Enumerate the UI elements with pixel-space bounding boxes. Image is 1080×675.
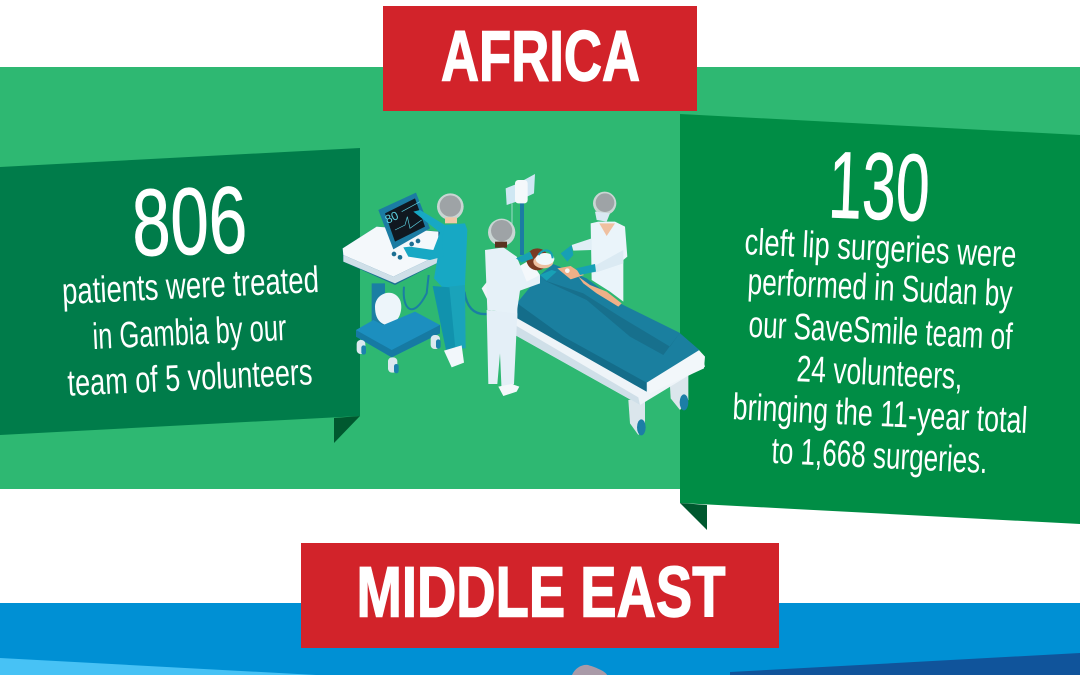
icon: tube — [464, 292, 487, 314]
heading: Middle East: MIDDLE EAST — [356, 554, 726, 632]
icon: surgeon at right — [561, 192, 627, 302]
panel: Middle East blue band — [0, 603, 1080, 675]
text: Gambia description — [61, 259, 320, 404]
text: Sudan description: to 1,668 surgeries. — [771, 430, 988, 481]
text: Gambia description: team of 5 volunteers — [67, 351, 313, 404]
icon: monitor cart: 80 — [383, 208, 401, 227]
panel: Gambia ribbon — [0, 148, 360, 443]
text: Sudan description: 24 volunteers, — [796, 348, 963, 397]
text: Gambia description: patients were treated — [61, 259, 320, 312]
icon: nurse at monitor — [403, 193, 467, 367]
heading: Middle East — [301, 543, 779, 648]
icon: IV stand — [506, 174, 535, 255]
text: Gambia description: in Gambia by our — [92, 307, 287, 357]
illustration: surgical team operating on a patient — [343, 174, 705, 435]
icon: operating table and patient — [482, 248, 705, 435]
icon: monitor cart — [343, 193, 442, 373]
stat: 130: 130 — [827, 132, 931, 242]
panel: Africa green band — [0, 67, 1080, 489]
text: Sudan description — [732, 221, 1028, 481]
heading: Africa: AFRICA — [441, 18, 640, 96]
stat: 806: 806 — [131, 167, 249, 277]
icon: surgeon at front — [485, 219, 540, 396]
panel: Sudan ribbon — [680, 114, 1080, 530]
heading: Africa — [383, 6, 697, 111]
